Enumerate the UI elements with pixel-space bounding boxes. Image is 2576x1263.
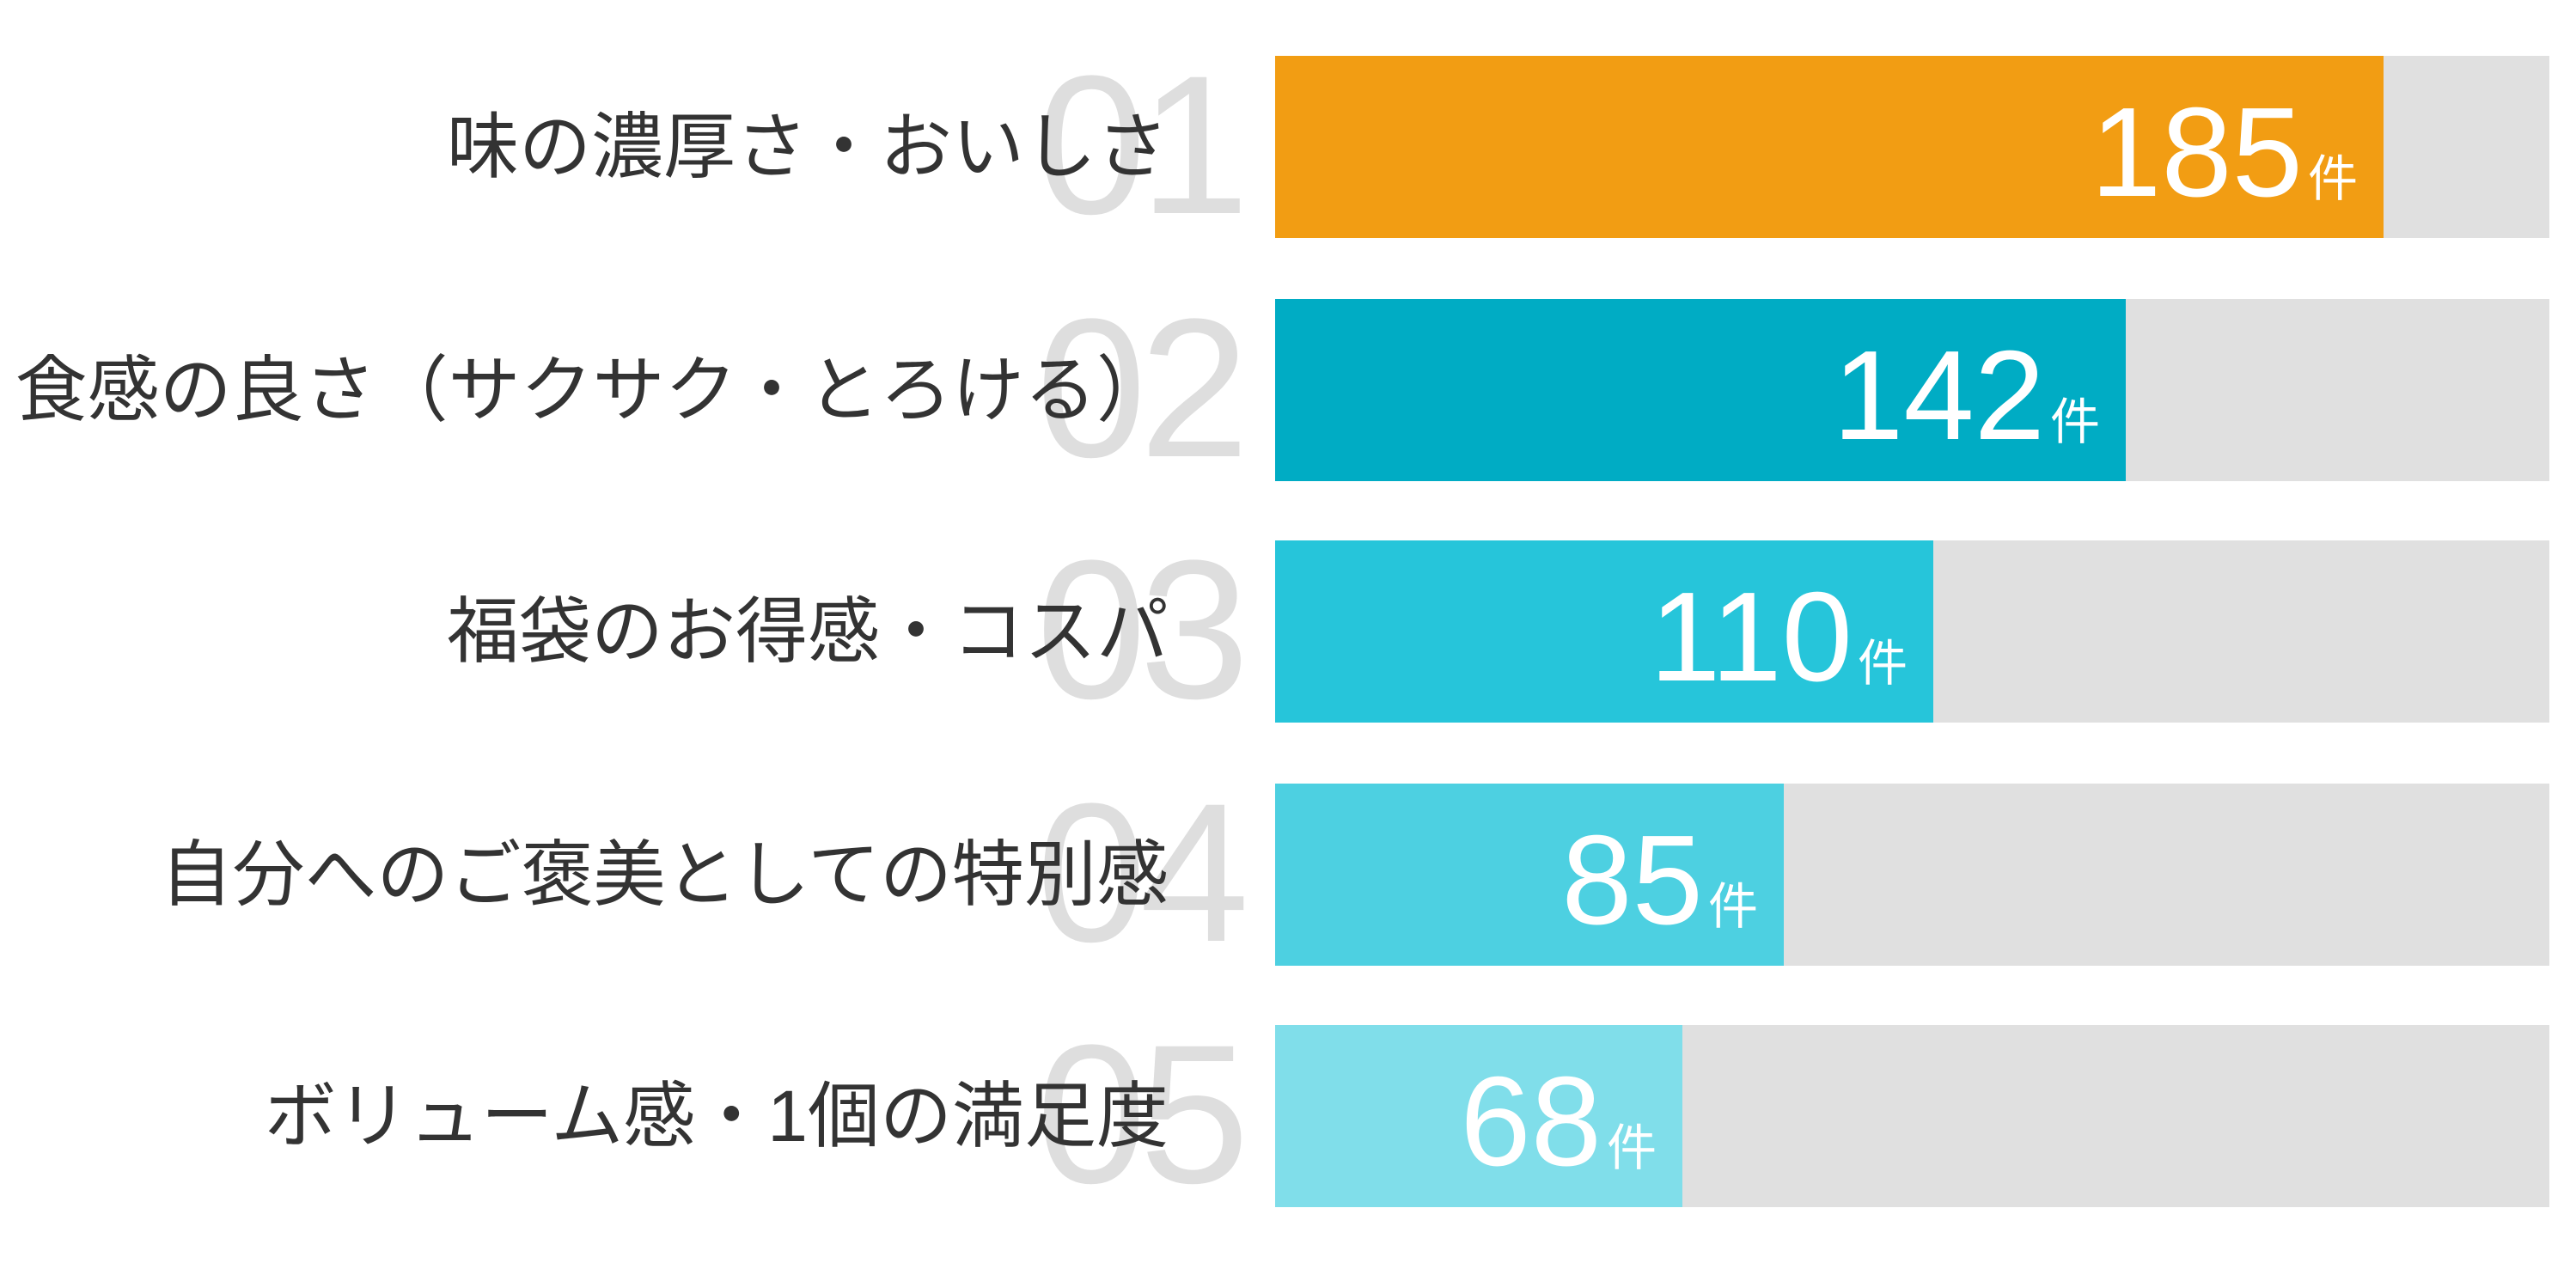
row 3: [447, 519, 2549, 740]
row 5: [265, 1004, 2549, 1224]
label 5: ボリューム感・1個の満足度: [265, 1076, 1169, 1156]
rank number 03: 03: [1036, 519, 1242, 740]
bar 3: 110件: [1650, 566, 1908, 708]
row 2: [15, 278, 2549, 498]
rank number 02: 02: [1036, 278, 1242, 498]
label 2: 食感の良さ（サクサク・とろける）: [15, 350, 1169, 430]
bar 5: 68件: [1460, 1051, 1657, 1193]
bar 4: [1275, 784, 2549, 966]
bar 2: [1275, 299, 2549, 481]
bar 2: 142件: [1833, 325, 2100, 467]
bar 1: 185件: [2091, 82, 2358, 223]
rank number 01: 01: [1036, 34, 1242, 255]
bar 5: [1275, 1025, 2549, 1207]
label 3: 福袋のお得感・コスパ: [447, 591, 1169, 672]
label 4: 自分へのご褒美としての特別感: [161, 834, 1169, 915]
rank number 04: 04: [1036, 762, 1242, 983]
row 4: [161, 762, 2549, 983]
bar 3: [1275, 540, 2549, 723]
bar 4: 85件: [1561, 809, 1758, 951]
rank number 05: 05: [1036, 1004, 1242, 1224]
bar 1: [1275, 56, 2549, 238]
label 1: 味の濃厚さ・おいしさ: [447, 107, 1169, 187]
row 1: [447, 34, 2549, 255]
